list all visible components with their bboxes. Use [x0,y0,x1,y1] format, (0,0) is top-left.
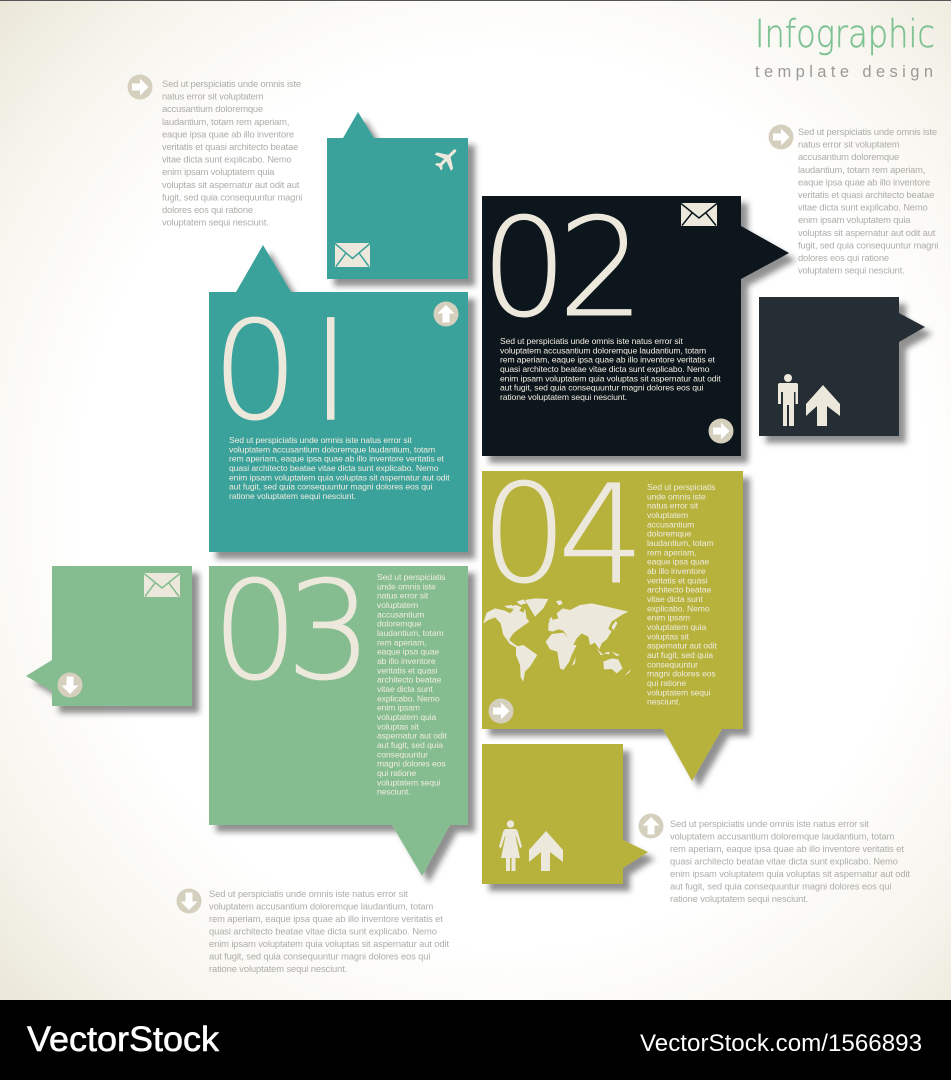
side note: bottom right [638,814,910,904]
panel text: veritatis et quasi [377,665,437,675]
number 01: 1 [284,293,371,451]
panel text: architecto beatae [647,585,712,595]
panel text: aspernatur aut odit [377,731,447,741]
speech shape [209,566,468,876]
number 02 [481,190,645,348]
side note: bottom right: voluptatem accusantium doloremque laudantium, totam [670,830,895,842]
side note: bottom left: quasi architecto beatae vitae dicta sunt explicabo. Nemo [209,926,437,936]
number 03: 0 [212,553,299,711]
panel text: voluptatem accusantium doloremque laudantium, totam [229,444,435,454]
side note: top right [768,124,938,276]
side note: bottom right: quasi architecto beatae vitae dicta sunt explicabo. Nemo [670,856,898,866]
panel text: quasi architecto beatae vitae dicta sunt explicabo. Nemo [500,364,710,374]
side note: bottom left: ratione voluptatem sequi nesciunt. [209,963,347,974]
panel text: doloremque [647,529,692,539]
speech shape [482,744,648,884]
panel text: veritatis et quasi [647,575,707,585]
panel text: voluptatem accusantium doloremque laudantium, totam [500,345,706,355]
panel text: rem aperiam, [377,637,426,647]
panel text: aut fugit, sed quia consequuntur magni dolores eos qui [229,482,433,492]
side note: top right: voluptatem sequi nesciunt. [798,265,905,276]
side note: bottom left: rem aperiam, eaque ipsa quae ab illo inventore veritatis et [209,913,443,924]
brand name: VectorStock [27,1020,220,1059]
side note: top left: natus error sit voluptatem [162,91,264,102]
panel text: Sed ut perspiciatis unde omnis iste natus error sit [229,435,412,445]
panel text: magni dolores eos [377,759,446,769]
panel 03 [209,553,468,876]
side note: top right: Sed ut perspiciatis unde omnis iste [798,126,937,137]
panel text: enim ipsam voluptatem quia voluptas sit aspernatur aut odit [229,472,450,482]
side note: top right: enim ipsam voluptatem quia [798,214,911,225]
footer watermark band [0,1000,951,1080]
panel text: eaque ipsa quae [647,557,709,567]
panel text: architecto beatae [377,675,442,685]
panel text: doloremque [377,619,422,629]
panel text: consequuntur [647,659,698,669]
panel text: nesciunt. [647,697,680,707]
small teal panel [327,112,468,279]
panel text: voluptas sit [647,631,690,641]
icon: right arrow circle [128,74,152,100]
panel text: voluptatem [647,510,688,520]
icon: envelope [681,203,717,226]
icon: envelope [335,243,370,267]
side note: top right: eaque ipsa quae ab illo inventore [798,176,930,187]
side note: bottom left [176,888,449,974]
panel text: vitae dicta sunt [647,594,703,604]
panel text: ab illo inventore [377,656,436,666]
side note: top left: eaque ipsa quae ab illo inventore [162,128,294,139]
panel text: explicabo. Nemo [647,603,710,613]
small olive panel [482,744,648,884]
side note: bottom left: voluptatem accusantium doloremque laudantium, totam [209,900,434,912]
panel text: ratione voluptatem sequi nesciunt. [500,392,627,402]
number 03: 3 [286,553,373,711]
icon: up arrow circle [434,302,458,326]
panel text: voluptatem sequi [647,687,711,697]
side note: top right: dolores eos qui ratione [798,252,889,263]
panel text: rem aperiam, eaque ipsa quae ab illo inventore veritatis et [500,355,716,365]
icon: right arrow circle [708,418,734,444]
top edge [0,0,951,1]
panel text: rem aperiam, [647,547,696,557]
number 03 [212,553,373,711]
panel text: ratione voluptatem sequi nesciunt. [229,491,356,501]
side note: top left: vitae dicta sunt explicabo. Nemo [162,154,292,165]
icon: down arrow circle [176,888,202,914]
subtitle: template design [755,63,933,81]
side note: bottom right: ratione voluptatem sequi nesciunt. [670,893,808,904]
icon: man [778,374,798,426]
icon: up arrow [529,831,563,871]
title [755,12,935,81]
side note: top left: laudantium, totam rem aperiam, [162,116,289,127]
side note: top right: veritatis et quasi architecto beatae [798,189,934,200]
side note: top left: fugit, sed quia consequuntur magni [162,191,302,202]
side note: top right: vitae dicta sunt explicabo. Nemo [798,202,928,213]
side note: bottom left: enim ipsam voluptatem quia voluptas sit aspernatur aut odit [209,938,449,949]
panel text: enim ipsam voluptatem quia voluptas sit aspernatur aut odit [500,373,721,383]
icon: envelope [144,573,180,597]
side note: top left: Sed ut perspiciatis unde omnis iste [162,78,301,89]
panel text: aut fugit, sed quia consequuntur magni dolores eos qui [500,383,704,393]
panel 02 [481,190,789,456]
number 01 [224,316,334,420]
side note: bottom right: enim ipsam voluptatem quia voluptas sit aspernatur aut odit [670,868,910,879]
speech shape [209,245,468,552]
panel text: Sed ut perspiciatis [647,482,715,492]
panel text: aspernatur aut odit [647,641,717,651]
panel text: qui ratione [647,678,686,688]
panel text: enim ipsam [647,613,690,623]
side note: bottom right: aut fugit, sed quia consequuntur magni dolores eos qui [670,880,891,892]
panel text: natus error sit [377,591,429,601]
side note: top right: accusantium doloremque [798,151,899,162]
panel text: accusantium [647,519,694,529]
side note: top left [128,74,302,228]
speech shape [327,112,468,279]
panel text: voluptatem [377,600,418,610]
number 04: 4 [558,457,645,615]
side note: bottom right: rem aperiam, eaque ipsa quae ab illo inventore veritatis et [670,843,904,854]
panel 04 [481,456,743,781]
number 02: 0 [481,190,568,348]
panel text: Sed ut perspiciatis unde omnis iste natus error sit [500,336,683,346]
small green panel [26,566,192,706]
panel text: nesciunt. [377,787,410,797]
icon: woman [499,820,522,871]
panel text: voluptatem quia [647,622,706,632]
image url: VectorStock.com/1566893 [640,1030,922,1057]
small dark panel [759,297,925,436]
side note: top left: accusantium doloremque [162,103,263,114]
panel text: voluptatem sequi [377,777,441,787]
speech shape [482,471,743,781]
speech shape [482,196,789,456]
panel text: consequuntur [377,749,428,759]
panel text: laudantium, totam [647,538,714,548]
icon: right arrow circle [488,698,514,724]
panel text: quasi architecto beatae vitae dicta sunt explicabo. Nemo [229,463,439,473]
number 01: 0 [212,293,299,451]
side note: bottom right: Sed ut perspiciatis unde omnis iste natus error sit [670,818,869,829]
icon: up arrow [806,385,840,426]
panel text: magni dolores eos [647,669,716,679]
side note: top left: voluptas sit aspernatur aut odit aut [162,179,300,190]
icon: down arrow circle [58,672,82,698]
panel text: laudantium, totam [377,628,444,638]
side note: top right: laudantium, totam rem aperiam, [798,164,925,175]
side note: top left: veritatis et quasi architecto beatae [162,141,298,152]
panel text: unde omnis iste [647,491,706,501]
panel text: voluptatem quia [377,712,436,722]
icon: right arrow circle [768,124,794,150]
panel text: explicabo. Nemo [377,693,440,703]
panel text: vitae dicta sunt [377,684,433,694]
speech shape [759,297,925,436]
number 02: 2 [558,190,645,348]
world map [483,598,631,682]
panel text: qui ratione [377,768,416,778]
side note: bottom left: Sed ut perspiciatis unde omnis iste natus error sit [209,888,408,899]
side note: top left: dolores eos qui ratione [162,204,253,215]
side note: bottom left: aut fugit, sed quia consequuntur magni dolores eos qui [209,950,430,962]
side note: top right: natus error sit voluptatem [798,139,900,150]
panel text: voluptas sit [377,721,420,731]
panel text: accusantium [377,609,424,619]
panel text: unde omnis iste [377,581,436,591]
icon: airplane [430,142,464,176]
panel text: aut fugit, sed quia [377,740,443,750]
icon: up arrow circle [638,814,664,838]
panel text: eaque ipsa quae [377,647,439,657]
panel text: aut fugit, sed quia [647,650,713,660]
number 04: 0 [481,456,568,614]
panel text: Sed ut perspiciatis [377,572,445,582]
side note: top left: voluptatem sequi nesciunt. [162,217,269,228]
side note: top right: fugit, sed quia consequuntur magni [798,239,938,250]
panel 01 [209,245,468,552]
panel text: rem aperiam, eaque ipsa quae ab illo inventore veritatis et [229,454,445,464]
panel text: ab illo inventore [647,566,706,576]
speech shape [26,566,192,706]
panel text: natus error sit [647,501,699,511]
side note: top left: enim ipsam voluptatem quia [162,166,275,177]
side note: top right: voluptas sit aspernatur aut odit aut [798,227,936,238]
panel text: enim ipsam [377,703,420,713]
number 04 [481,456,645,615]
